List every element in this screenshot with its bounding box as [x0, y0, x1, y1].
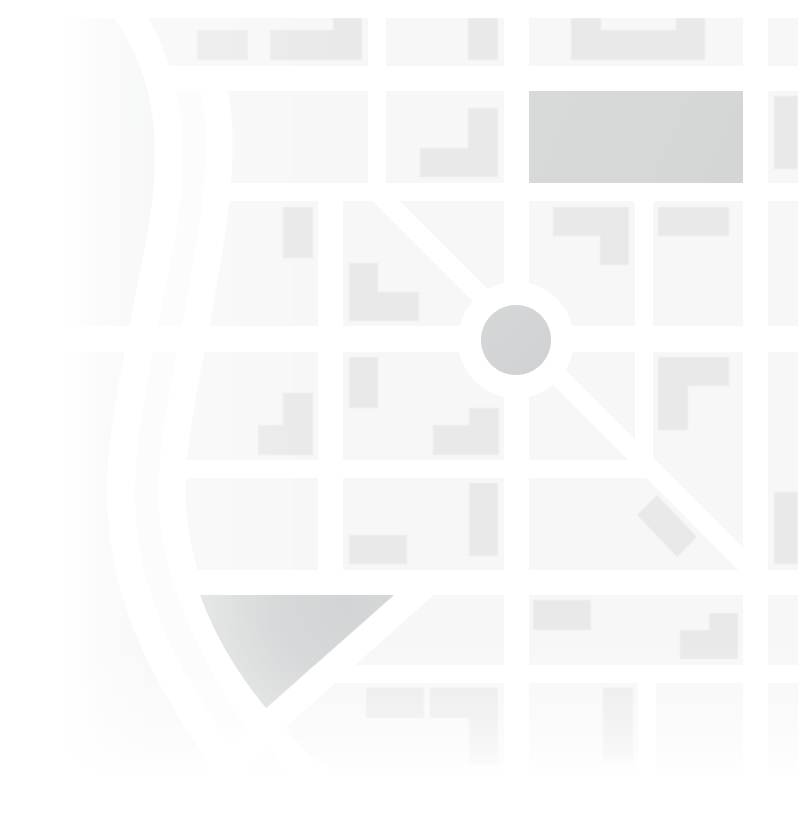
left margin: [0, 0, 60, 816]
southwest diagonal road: [205, 586, 424, 790]
buildings: [197, 18, 798, 765]
top margin: [0, 0, 802, 18]
highlighted block: triangle: [200, 595, 394, 708]
water area: [60, 8, 235, 775]
curved road: outer: [121, 8, 235, 775]
curved road: inner: [172, 70, 325, 790]
vertical roads: [318, 18, 768, 788]
bottom fade overlay: [0, 640, 802, 816]
roundabout ring: [458, 282, 574, 398]
right margin: [798, 0, 802, 816]
bottom margin: [0, 780, 802, 816]
highlighted block: rectangle: [529, 91, 743, 183]
roundabout center: [481, 305, 551, 375]
diagonal roads: [372, 187, 760, 578]
left fade overlay: [60, 0, 350, 816]
horizontal roads: [40, 66, 802, 683]
riverside strip: [147, 72, 262, 775]
